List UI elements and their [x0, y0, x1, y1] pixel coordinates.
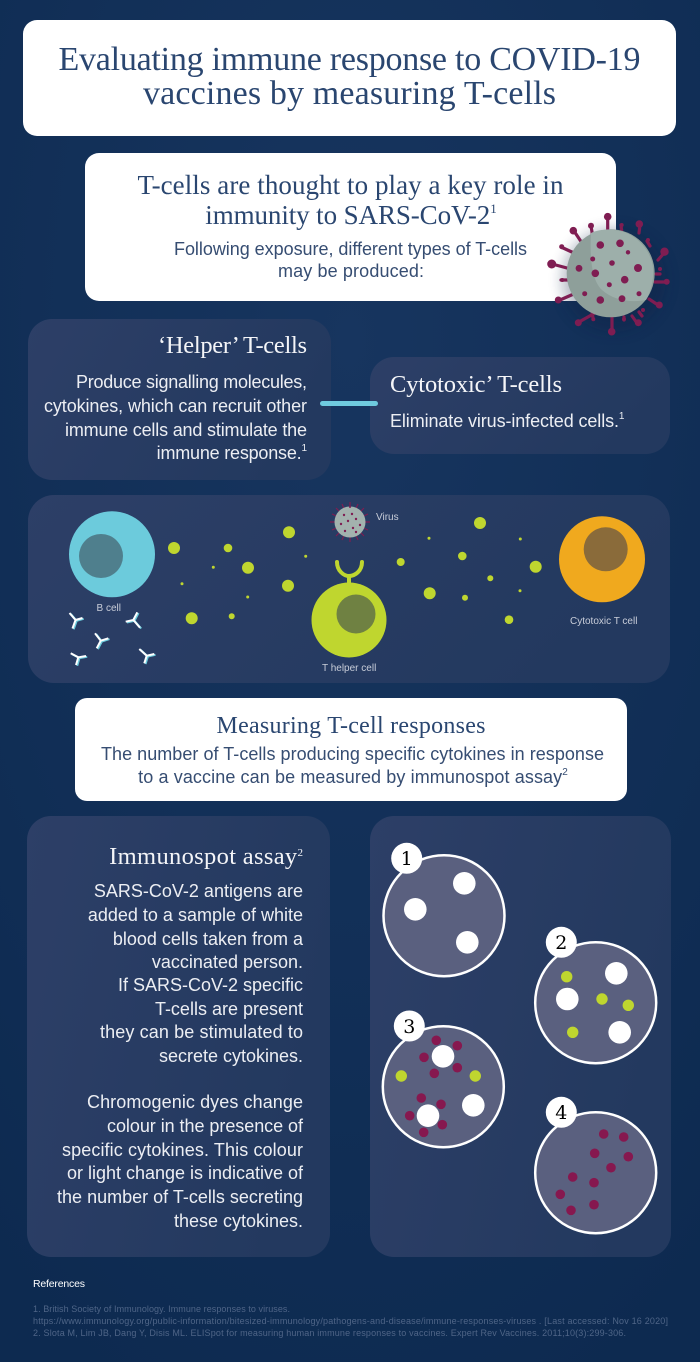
heading: immunospot assay: 2: [298, 847, 303, 859]
text: assay step one: vaccinated person.: [152, 952, 303, 972]
text: measuring description: to a vaccine can be measured by immunospot assay: [138, 767, 562, 787]
text: cytotoxic description: 1: [619, 411, 625, 422]
title panel: [23, 20, 676, 136]
label: virus: Virus: [376, 512, 399, 523]
panel: immunospot text: [27, 816, 330, 1257]
well 1: 1: [401, 848, 413, 870]
text: cytotoxic description: Eliminate virus-infected cells.: [390, 411, 619, 431]
text: assay step one: secrete cytokines.: [159, 1046, 303, 1066]
text: assay step one: SARS-CoV-2 antigens are: [94, 881, 303, 901]
text: assay step two: these cytokines.: [174, 1211, 303, 1231]
text: helper description: cytokines, which can recruit other: [44, 396, 307, 416]
well 4: 4: [555, 1102, 567, 1124]
icon: B cell: [69, 511, 155, 597]
text: assay step two: Chromogenic dyes change: [87, 1092, 303, 1112]
well 3: [383, 1010, 504, 1147]
reference list: 1. British Society of Immunology. Immune responses to viruses.: [33, 1304, 290, 1314]
text: measuring description: The number of T-cells producing specific cytokines in response: [101, 744, 604, 764]
text: assay step one: added to a sample of white: [88, 905, 303, 925]
icon: small virus: [330, 502, 370, 542]
heading: helper T-cells: ‘Helper’ T-cells: [158, 332, 307, 359]
well 3: 3: [403, 1016, 415, 1038]
label: T helper cell: T helper cell: [322, 663, 376, 674]
heading: measuring: Measuring T-cell responses: [216, 713, 486, 739]
text: assay step two: the number of T-cells secreting: [57, 1187, 303, 1207]
text: assay step one: they can be stimulated to: [100, 1022, 303, 1042]
heading: immunospot assay: Immunospot assay: [109, 843, 298, 870]
text: assay step two: or light change is indicative of: [67, 1163, 304, 1183]
well 4: [535, 1097, 656, 1233]
connector line: [320, 401, 378, 406]
heading: key role: immunity to SARS-CoV-2: [205, 200, 490, 230]
reference list: https://www.immunology.org/public-information/bitesized-immunology/pathogens-and-disease/immune-responses-viruses . [Last accessed: Nov 16 2020]: [33, 1316, 668, 1326]
text: helper description: immune cells and stimulate the: [65, 420, 307, 440]
panel: measuring T-cell responses: [75, 698, 627, 801]
title: Evaluating immune response to COVID-19: [58, 41, 640, 78]
well 2: [535, 927, 656, 1063]
panel: cell diagram: [28, 495, 670, 683]
text: assay step one: T-cells are present: [155, 999, 303, 1019]
icon: antibodies: [70, 612, 156, 666]
cytokine particles: [168, 517, 542, 624]
panel: T-cells key role: [85, 153, 616, 301]
text: assay step one: blood cells taken from a: [113, 929, 304, 949]
icon: cytotoxic T cell: [559, 516, 645, 602]
text: following exposure: may be produced:: [278, 261, 424, 281]
references: [33, 1278, 668, 1338]
icon: coronavirus: [547, 213, 670, 336]
well 1: [384, 843, 504, 976]
heading: cytotoxic T-cells: Cytotoxic’ T-cells: [390, 371, 562, 398]
title: vaccines by measuring T-cells: [143, 75, 556, 112]
heading: key role: T-cells are thought to play a key role in: [138, 170, 564, 200]
label: cytotoxic T cell: Cytotoxic T cell: [570, 616, 637, 627]
text: helper description: Produce signalling molecules,: [76, 372, 307, 392]
text: helper description: immune response.: [157, 443, 302, 463]
references heading: References: [33, 1278, 85, 1290]
panel: immunospot wells: [370, 816, 671, 1257]
text: following exposure: Following exposure, different types of T-cells: [174, 239, 527, 259]
text: measuring description: 2: [562, 767, 568, 778]
reference list: 2. Slota M, Lim JB, Dang Y, Disis ML. ELISpot for measuring human immune responses to vaccines. Expert Rev Vaccines. 2011;10(3):299-306.: [33, 1328, 626, 1338]
label: B cell: B cell: [96, 603, 121, 614]
text: helper description: 1: [301, 443, 307, 454]
text: assay step two: colour in the presence of: [107, 1116, 304, 1136]
panel: cytotoxic T-cells: [370, 357, 670, 454]
heading: key role: 1: [490, 201, 497, 216]
text: assay step two: specific cytokines. This colour: [62, 1140, 303, 1160]
well 2: 2: [555, 932, 567, 954]
panel: helper T-cells: [28, 319, 331, 480]
text: assay step one: If SARS-CoV-2 specific: [118, 975, 303, 995]
icon: T helper cell: [312, 562, 386, 658]
